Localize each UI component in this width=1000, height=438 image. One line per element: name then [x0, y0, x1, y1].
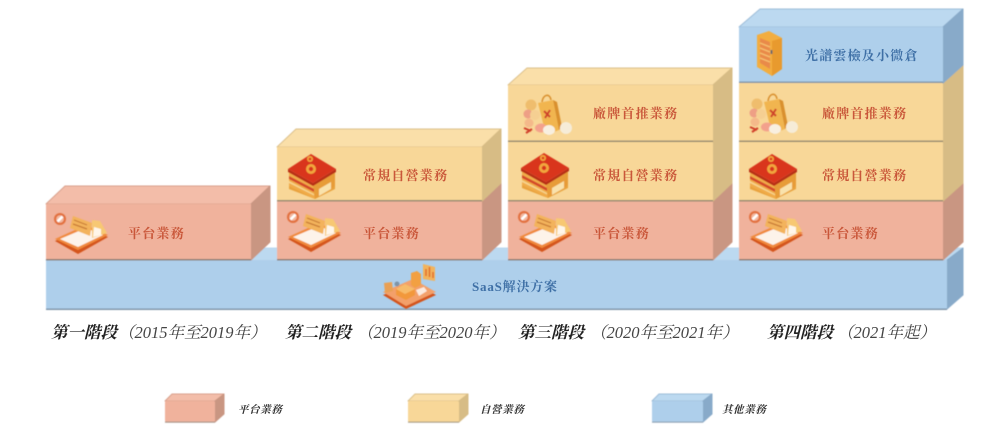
- legend: other: [652, 394, 712, 423]
- icon: SaaS platform: [383, 264, 436, 309]
- stage 3 label: 第三階段: [518, 323, 586, 342]
- label: other services: 光譜雲檢及小微倉: [805, 48, 919, 63]
- label: stage 4 platform: 平台業務: [822, 226, 879, 241]
- label: stage 3 self-operated: 常規自營業務: [593, 168, 678, 183]
- icon: warehouse stage 2: [288, 154, 336, 199]
- stage 1 label: 第一階段: [51, 323, 120, 342]
- stage 4 label: （2021年起）: [837, 323, 936, 342]
- legend: self-operated: [408, 394, 468, 423]
- panel: stage 2 self-operated box: [277, 129, 501, 202]
- label: SaaS: SaaS解決方案: [472, 279, 558, 294]
- icon: vending machine: [757, 31, 782, 76]
- panel: stage 1 platform box: [46, 186, 270, 260]
- icon: warehouse stage 4: [749, 154, 797, 199]
- stage 2 label: 第二階段: [285, 323, 354, 342]
- legend: platform: [165, 394, 224, 423]
- label: stage 1 platform: 平台業務: [128, 226, 185, 241]
- stage 3 label: （2020年至2021年）: [590, 323, 738, 342]
- label: stage 2 platform: 平台業務: [363, 226, 420, 241]
- label: stage 3 platform: 平台業務: [593, 226, 650, 241]
- label: stage 4 self-operated: 常規自營業務: [822, 168, 907, 183]
- panel: stage 4 other services box: [739, 9, 963, 83]
- panel: stage 4 brand box: [739, 65, 963, 142]
- icon: platform phone stage 1: [54, 213, 108, 254]
- stage 4 label: 第四階段: [767, 323, 836, 342]
- stage 1 label: （2015年至2019年）: [118, 323, 266, 342]
- legend text: platform: 平台業務: [238, 404, 284, 416]
- icon: warehouse stage 3: [521, 153, 569, 198]
- panel: stage 2 platform box: [277, 183, 501, 260]
- panel: stage 4 self-operated box: [739, 124, 963, 202]
- icon: platform phone stage 3: [518, 211, 572, 252]
- icon: shopping bag stage 3: [524, 95, 572, 135]
- panel: SaaS base layer: [46, 248, 963, 310]
- label: stage 2 self-operated: 常規自營業務: [363, 168, 448, 183]
- icon: platform phone stage 4: [749, 211, 803, 252]
- label: stage 4 brand: 廠牌首推業務: [822, 106, 907, 121]
- panel: stage 3 self-operated box: [508, 124, 732, 202]
- panel: stage 4 platform box: [739, 183, 963, 260]
- icon: shopping bag stage 4: [750, 94, 798, 134]
- panel: stage 3 platform box: [508, 183, 732, 260]
- legend text: self-operated: 自營業務: [480, 404, 526, 416]
- icon: platform phone stage 2: [287, 211, 341, 252]
- stage 2 label: （2019年至2020年）: [357, 323, 506, 342]
- legend text: other: 其他業務: [722, 404, 768, 416]
- panel: stage 3 brand box: [508, 68, 732, 142]
- label: stage 3 brand: 廠牌首推業務: [593, 106, 678, 121]
